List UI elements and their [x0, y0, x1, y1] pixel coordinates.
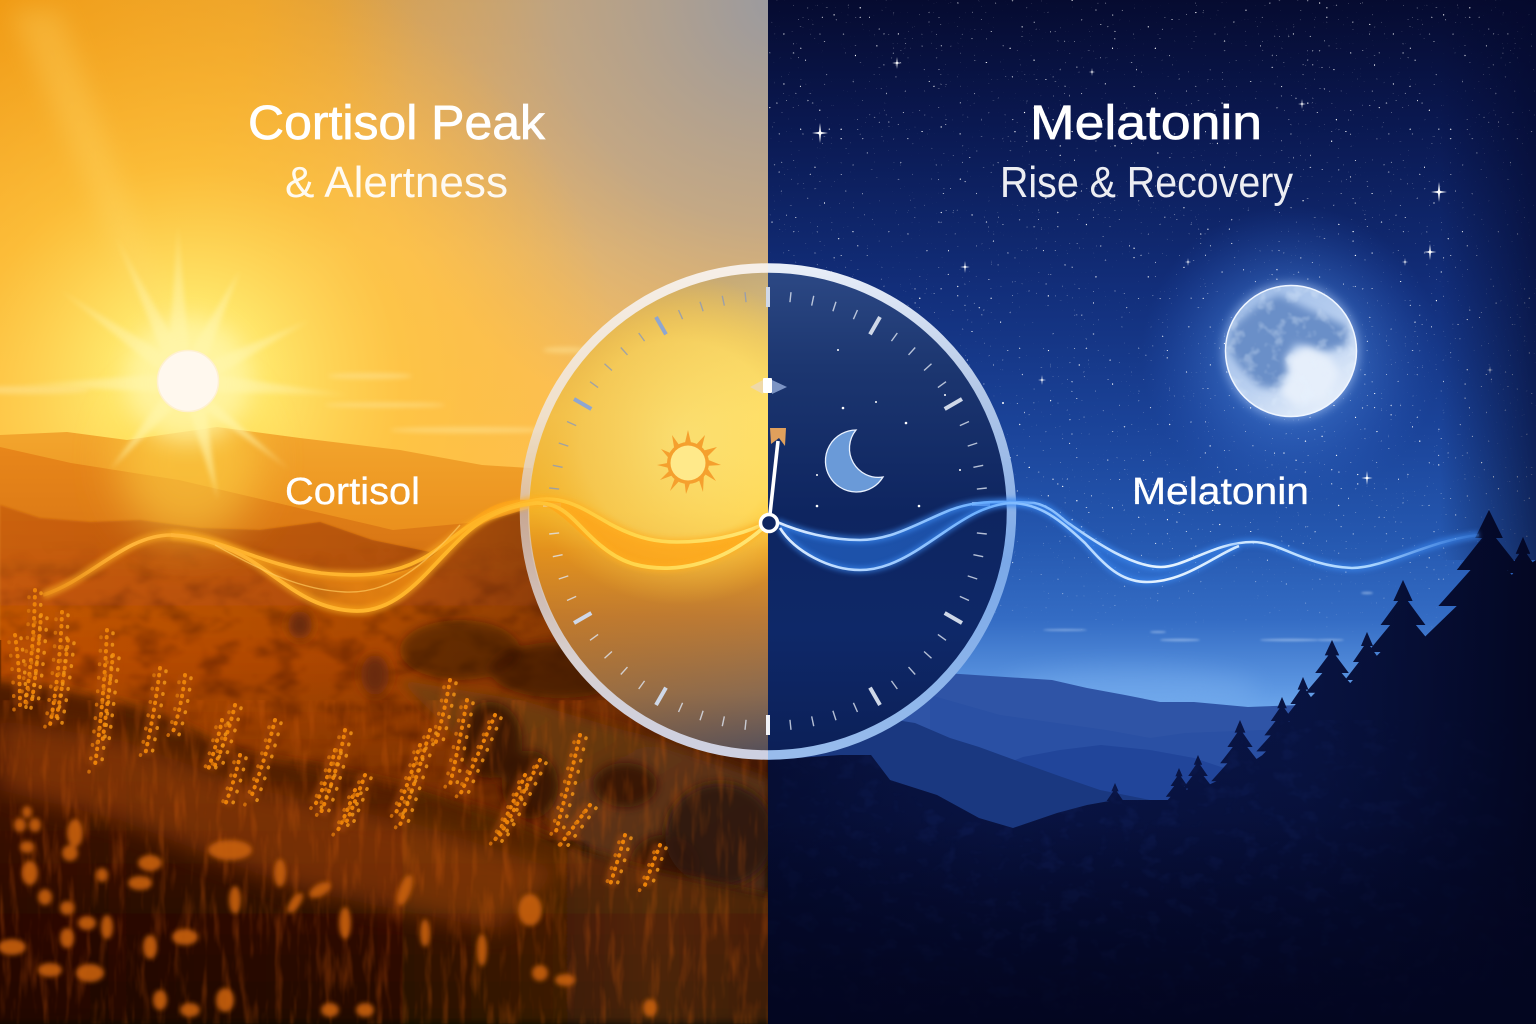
clock dial: [285, 268, 1309, 755]
title: Cortisol Peak and Alertness: Cortisol Peak: [248, 97, 546, 150]
middle hills: [0, 447, 468, 640]
dark forest: [768, 500, 1536, 1024]
faint long sun streak: [14, 6, 128, 234]
clock ring: [524, 268, 1012, 755]
horizon haze streaks: [1043, 592, 1373, 641]
meadow field: [400, 680, 768, 900]
out-of-focus foreground blossoms: [0, 806, 657, 1017]
forested ridge: [768, 721, 1149, 828]
title: Melatonin Rise and Recovery: [1000, 97, 1293, 207]
panel: daytime sunrise scene: [0, 0, 790, 1024]
sun glow over hills: [118, 380, 258, 540]
icon: crescent moon: [825, 430, 883, 492]
grass seed heads: [9, 590, 666, 892]
moon halo glow: [1164, 221, 1418, 470]
far hills: [0, 427, 529, 530]
wispy lower sky glow: [1028, 667, 1242, 702]
label: Melatonin: Melatonin: [1132, 471, 1309, 513]
clock hand with arrow tip: [769, 428, 786, 523]
day half of clock face: [528, 273, 768, 750]
sun rays: [46, 242, 328, 494]
melatonin wave: [777, 501, 1479, 582]
tree-line hills: [0, 505, 768, 840]
title: Melatonin Rise and Recovery: Rise & Recovery: [1000, 158, 1293, 207]
title: Melatonin Rise and Recovery: Melatonin: [1030, 97, 1262, 150]
clock hour ticks: [543, 287, 990, 735]
big moon: [1223, 283, 1359, 419]
bright sparkle stars: [812, 57, 1493, 485]
twelve o'clock marker: [750, 378, 787, 394]
cortisol wave: [43, 499, 763, 611]
panel: night sky scene: [768, 0, 1536, 1024]
clock hub: [760, 514, 778, 532]
middle mountain ridge: [930, 695, 1300, 830]
night half of clock face: [768, 272, 1007, 750]
foreground grass: [0, 680, 790, 1024]
right edge vignette: [1440, 0, 1536, 560]
icon: sun: [657, 430, 721, 494]
clock minute ticks: [549, 292, 987, 730]
sky background: [0, 0, 768, 468]
night sky background: [768, 0, 1536, 707]
near blue mountain: [1016, 745, 1223, 800]
star field: [768, 0, 1536, 700]
thin cloud streaks: [0, 347, 587, 433]
dark shrubs: [288, 611, 775, 895]
sun disc: [126, 318, 250, 442]
label: Cortisol: Cortisol: [285, 471, 420, 513]
title: Cortisol Peak and Alertness: & Alertness: [285, 158, 508, 207]
title: Cortisol Peak and Alertness: [248, 97, 546, 207]
far mountains: [902, 674, 1295, 738]
